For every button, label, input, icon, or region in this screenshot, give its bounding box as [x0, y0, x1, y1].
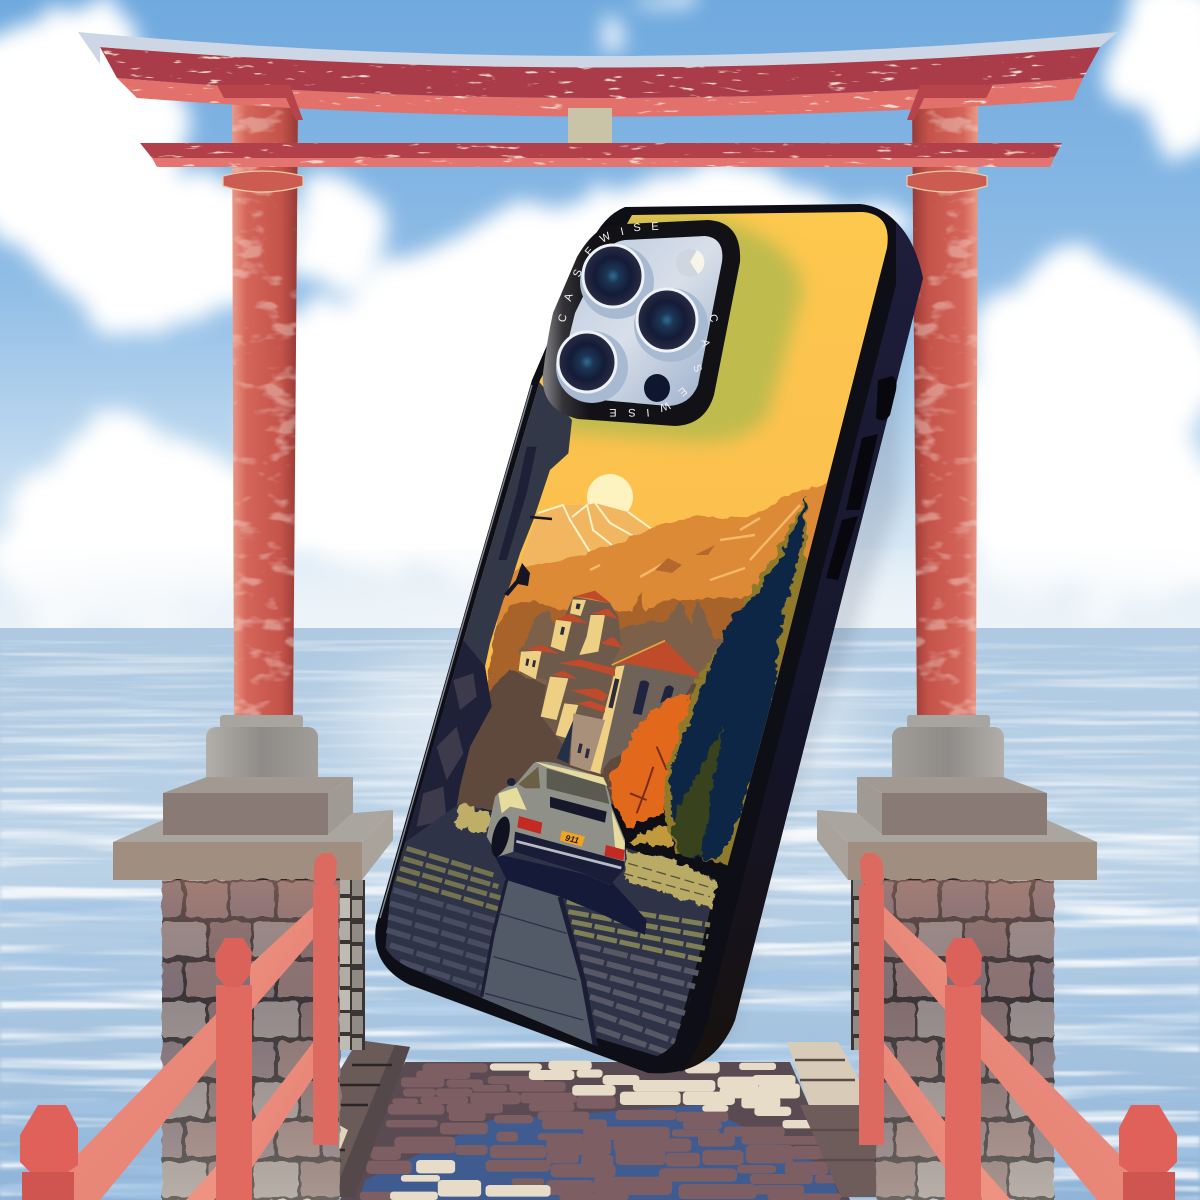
- right pillar and base: [817, 100, 1097, 880]
- water: [0, 628, 1200, 1200]
- brand text: C: [706, 313, 720, 323]
- camera shadow on art: [560, 215, 803, 442]
- mirror: [507, 778, 516, 786]
- left cobbles upper: [397, 848, 502, 910]
- brand text: S: [633, 222, 641, 234]
- orange hill: [490, 483, 840, 760]
- brand text: I: [646, 406, 650, 418]
- rock wall: [404, 382, 572, 843]
- distant shed: [700, 856, 722, 864]
- pillar heads: [217, 85, 993, 120]
- sun: [587, 474, 633, 512]
- right brick pier: [851, 880, 1054, 1200]
- upper front rail: [40, 990, 240, 1200]
- pillar shaft: [232, 100, 298, 720]
- top beam of torii: [78, 32, 1118, 119]
- engine vent: [550, 797, 607, 823]
- brand text: E: [583, 245, 597, 258]
- brand text: [556, 221, 720, 418]
- left brick pier: [162, 880, 365, 1200]
- side buttons: [826, 376, 896, 580]
- end post: [20, 1105, 78, 1200]
- roof highlight: [612, 641, 665, 665]
- stone footing: [113, 715, 393, 880]
- olive fringe: [663, 497, 807, 867]
- brand text: S: [571, 268, 585, 279]
- brand text: E: [609, 406, 617, 418]
- cap of beam: [78, 32, 1118, 68]
- right curb: [787, 1042, 925, 1197]
- hedge: [627, 825, 672, 847]
- left curb: [264, 1040, 410, 1200]
- right cobbles upper: [567, 902, 710, 960]
- shadowed cobbles: [360, 1063, 841, 1200]
- tan walls: [519, 599, 626, 774]
- grey-brown conifers: [518, 600, 724, 686]
- side window: [518, 767, 540, 788]
- case drop shadow: [700, 300, 900, 1060]
- wall bracket: [530, 517, 552, 519]
- pillar collar: [223, 171, 303, 192]
- lower rear rail: [252, 1023, 332, 1168]
- dark lower forest: [457, 670, 696, 810]
- brand text: A: [698, 338, 712, 349]
- stone walkway: [264, 1040, 925, 1200]
- left cobbles lower: [387, 890, 498, 988]
- lidar sensor: [644, 374, 670, 402]
- road cracks: [482, 880, 597, 1053]
- right head: [907, 85, 993, 120]
- windows: [525, 603, 619, 758]
- lower tower: [570, 713, 605, 772]
- church wall: [600, 663, 695, 773]
- case artwork: [386, 212, 888, 1056]
- flash: [676, 249, 704, 277]
- lens 1: [580, 245, 654, 319]
- puddle bed: [340, 1062, 850, 1200]
- church windows: [633, 680, 674, 715]
- brand text: E: [651, 221, 659, 233]
- reflected water between stones: [360, 1105, 840, 1200]
- sunlit cobbles: [390, 1061, 817, 1200]
- snow ridge lines: [538, 503, 653, 552]
- case body: [375, 204, 923, 1073]
- red roofs: [523, 591, 623, 713]
- wall lantern: [504, 563, 530, 596]
- bumper chrome: [516, 840, 622, 869]
- bumper: [513, 832, 625, 885]
- beam dark face: [100, 47, 1100, 98]
- beam underside: [117, 78, 1083, 117]
- car shadow: [493, 853, 647, 935]
- center slab: [482, 880, 594, 1045]
- translucent side wall: [680, 222, 923, 1072]
- brand text: W: [657, 399, 672, 414]
- orange tree: [608, 692, 692, 828]
- right railing: [859, 853, 1177, 1200]
- rear post: [313, 853, 338, 1145]
- upper rear rail: [250, 893, 332, 1012]
- lower front rail: [186, 1165, 240, 1200]
- hill smudge: [655, 545, 715, 573]
- lens 2: [634, 288, 708, 362]
- sunlit cobbles: [455, 804, 490, 835]
- brand text: W: [598, 230, 613, 246]
- left pillar and base: [113, 100, 393, 880]
- right cobbles lower: [577, 943, 698, 1053]
- phone case: [320, 204, 923, 1073]
- hill highlights: [590, 505, 800, 580]
- camera plate: [562, 236, 722, 406]
- village: [519, 591, 702, 774]
- brand text: A: [562, 291, 576, 303]
- sports car: [487, 762, 625, 885]
- lower tie beam: [140, 143, 1062, 167]
- brand text: I: [619, 226, 625, 238]
- central strut: [568, 108, 612, 144]
- rear window: [547, 768, 609, 804]
- license plate: 911: [564, 833, 580, 846]
- cypress in village: [557, 720, 573, 763]
- tall cypress tree: [663, 497, 807, 867]
- church roof: [612, 641, 702, 677]
- car body: [487, 762, 625, 885]
- pale far mountains: [518, 503, 650, 569]
- tail lights: [517, 816, 625, 861]
- car highlights: [498, 762, 625, 857]
- art sky: [444, 212, 888, 705]
- village body: [520, 597, 622, 773]
- silver glint on left edge: [380, 385, 532, 918]
- camera ring: [543, 220, 740, 426]
- left head: [217, 85, 303, 120]
- camera module: [543, 220, 740, 426]
- brand text: S: [628, 406, 636, 418]
- clouds: [0, 0, 1200, 648]
- sunlit right pavement: [623, 850, 717, 908]
- artwork details drawn in zoom coordinates: [386, 382, 808, 1056]
- road: [383, 803, 717, 1060]
- navy foliage: [670, 497, 807, 860]
- brand text: S: [690, 363, 704, 374]
- lens 3: [556, 331, 628, 403]
- left railing: [20, 853, 338, 1200]
- hatching on sunlit pavement: [623, 863, 713, 897]
- left wheel: [488, 815, 513, 859]
- brand text: E: [676, 384, 689, 398]
- brand text: C: [556, 313, 570, 324]
- forest band: [488, 581, 802, 800]
- front post: [215, 938, 252, 1200]
- shaded olive lower foliage: [672, 727, 723, 857]
- sky background: [0, 0, 1200, 630]
